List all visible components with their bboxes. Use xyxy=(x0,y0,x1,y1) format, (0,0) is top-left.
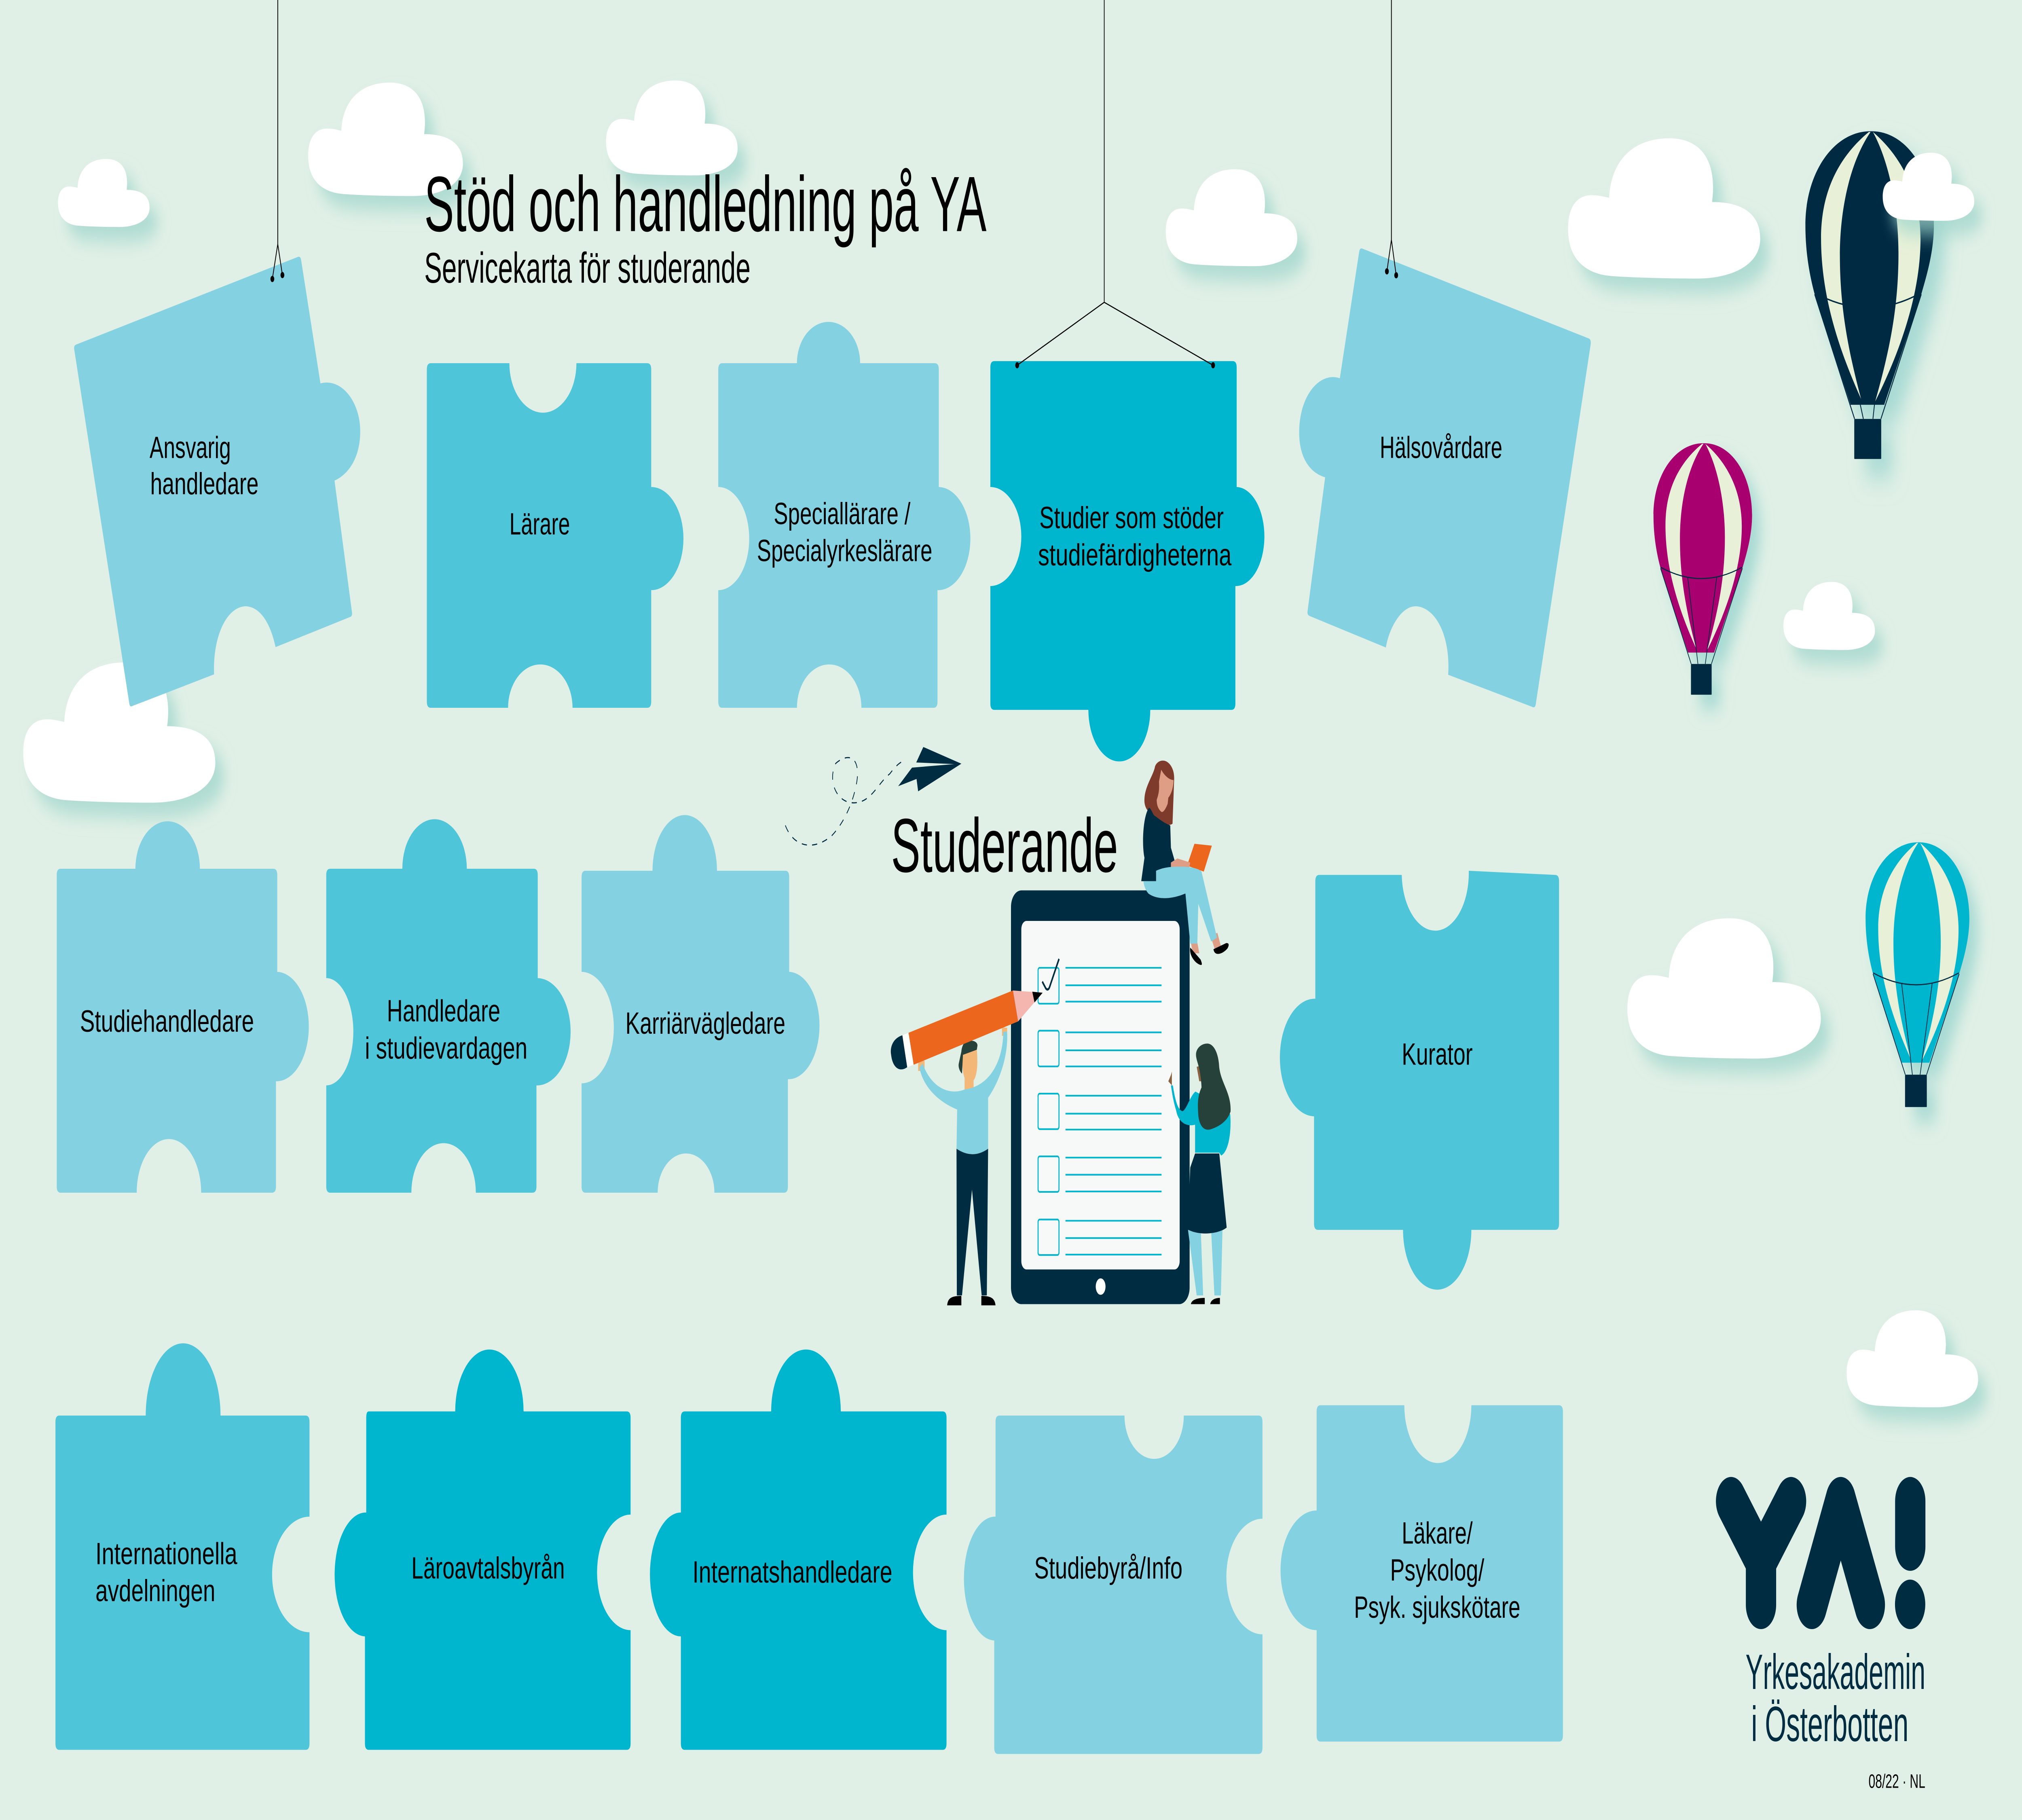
logo text line 1: Yrkesakademin xyxy=(1745,1644,1925,1699)
label: Karriärvägledare xyxy=(626,1006,785,1041)
puzzle piece: Hälsovårdare xyxy=(1299,248,1591,707)
hair xyxy=(958,1041,977,1074)
subtitle: Servicekarta för studerande xyxy=(424,243,751,292)
puzzle piece: Internatshandledare xyxy=(650,1350,947,1750)
cloud: top right large xyxy=(1568,138,1760,279)
hanging string: Hälsovårdare xyxy=(1385,0,1398,278)
figure: woman sitting on tablet xyxy=(1141,761,1229,965)
label: Internationella xyxy=(95,1536,237,1571)
logo: YA! xyxy=(1731,1477,1925,1629)
puzzle piece: Kurator xyxy=(1280,871,1559,1290)
icon: pencil xyxy=(891,990,1043,1069)
trousers xyxy=(956,1149,988,1295)
icon: paper plane xyxy=(898,747,961,791)
label: Ansvarig xyxy=(150,430,231,465)
label: Hälsovårdare xyxy=(1380,430,1502,465)
label line 2: avdelningen xyxy=(95,1573,216,1608)
puzzle piece: Läroavtalsbyrån xyxy=(334,1350,630,1750)
cloud: left behind puzzle piece xyxy=(23,662,215,803)
torso xyxy=(1141,808,1177,882)
balloon: teal xyxy=(1865,842,1969,1107)
cloud: right small xyxy=(1783,582,1875,650)
puzzle piece: Studiehandledare xyxy=(57,821,309,1193)
heading: Studerande: Studerande xyxy=(891,804,1118,888)
shoes xyxy=(947,1296,996,1306)
balloon: dark blue xyxy=(1805,131,1934,459)
hanging string: Ansvarig xyxy=(271,0,284,282)
puzzle piece: Studiebyrå/Info xyxy=(964,1416,1263,1754)
label: Studiebyrå/Info xyxy=(1034,1551,1182,1585)
label line 3: Psyk. sjukskötare xyxy=(1354,1589,1521,1625)
label line 2: handledare xyxy=(150,466,258,501)
label: Handledare xyxy=(387,993,500,1028)
balloon: magenta xyxy=(1654,443,1752,695)
illustration: tablet with checklist xyxy=(1011,891,1190,1304)
label: Internatshandledare xyxy=(692,1555,893,1589)
label line 2: i studievardagen xyxy=(365,1031,527,1065)
cloud: top middle xyxy=(1166,169,1297,266)
legs xyxy=(1188,1230,1223,1295)
puzzle piece: Lärare xyxy=(427,363,683,708)
cloud: above logo xyxy=(1846,1310,1978,1407)
face xyxy=(1157,770,1174,812)
cloud: in front of dark balloon xyxy=(1883,153,1974,221)
hair xyxy=(1144,761,1174,825)
label line 2: Psykolog/ xyxy=(1390,1553,1485,1587)
label: Lärare xyxy=(510,506,570,541)
label: Studiehandledare xyxy=(80,1003,254,1039)
shoes and ankles xyxy=(1190,933,1221,953)
laptop xyxy=(1187,844,1212,872)
skirt xyxy=(1188,1153,1227,1234)
cloud: right middle xyxy=(1627,918,1821,1058)
label: Läroavtalsbyrån xyxy=(411,1551,565,1585)
hair xyxy=(1196,1043,1231,1130)
label: Speciallärare / xyxy=(774,496,911,531)
label line 2: studiefärdigheterna xyxy=(1038,537,1232,572)
figure: woman standing xyxy=(1168,1043,1231,1304)
label line 2: Specialyrkeslärare xyxy=(757,533,932,568)
logo text line 2: i Österbotten xyxy=(1751,1697,1908,1752)
label: Läkare/ xyxy=(1402,1515,1473,1550)
checklist lines xyxy=(1066,968,1161,1255)
top and arms xyxy=(1171,1086,1231,1155)
hands xyxy=(1171,858,1190,869)
version note: 08/22 · NL xyxy=(1869,1770,1925,1792)
cloud: top behind title left xyxy=(308,83,463,196)
puzzle piece: Speciallärare xyxy=(718,322,971,708)
title: Stöd och handledning på YA xyxy=(424,161,987,248)
check mark xyxy=(1042,959,1059,990)
shoes xyxy=(1191,1298,1220,1304)
puzzle piece: Ansvarig handledare xyxy=(74,257,360,707)
label: Kurator xyxy=(1402,1037,1473,1071)
face xyxy=(1197,1065,1204,1081)
figure: man holding pencil xyxy=(918,1028,1007,1306)
cloud: small top left xyxy=(58,159,150,227)
legs xyxy=(1144,867,1217,944)
puzzle piece: Internationella avdelningen xyxy=(55,1343,309,1750)
checkboxes xyxy=(1038,968,1059,1255)
puzzle piece: Studier som stöder studiefärdigheterna xyxy=(990,361,1265,762)
dashed flight path xyxy=(785,758,903,845)
shirt xyxy=(920,1032,1007,1154)
puzzle piece: Handledare i studievardagen xyxy=(326,819,571,1193)
hand xyxy=(1168,1071,1172,1086)
neck and head xyxy=(918,1028,1007,1090)
puzzle piece: Karriärvägledare xyxy=(582,815,819,1193)
label: Studier som stöder xyxy=(1039,500,1224,535)
cloud: top behind title right xyxy=(606,80,738,176)
hanging string: Studier xyxy=(1015,0,1215,368)
puzzle piece: Läkare Psykolog Psyk. sjukskötare xyxy=(1280,1405,1563,1742)
